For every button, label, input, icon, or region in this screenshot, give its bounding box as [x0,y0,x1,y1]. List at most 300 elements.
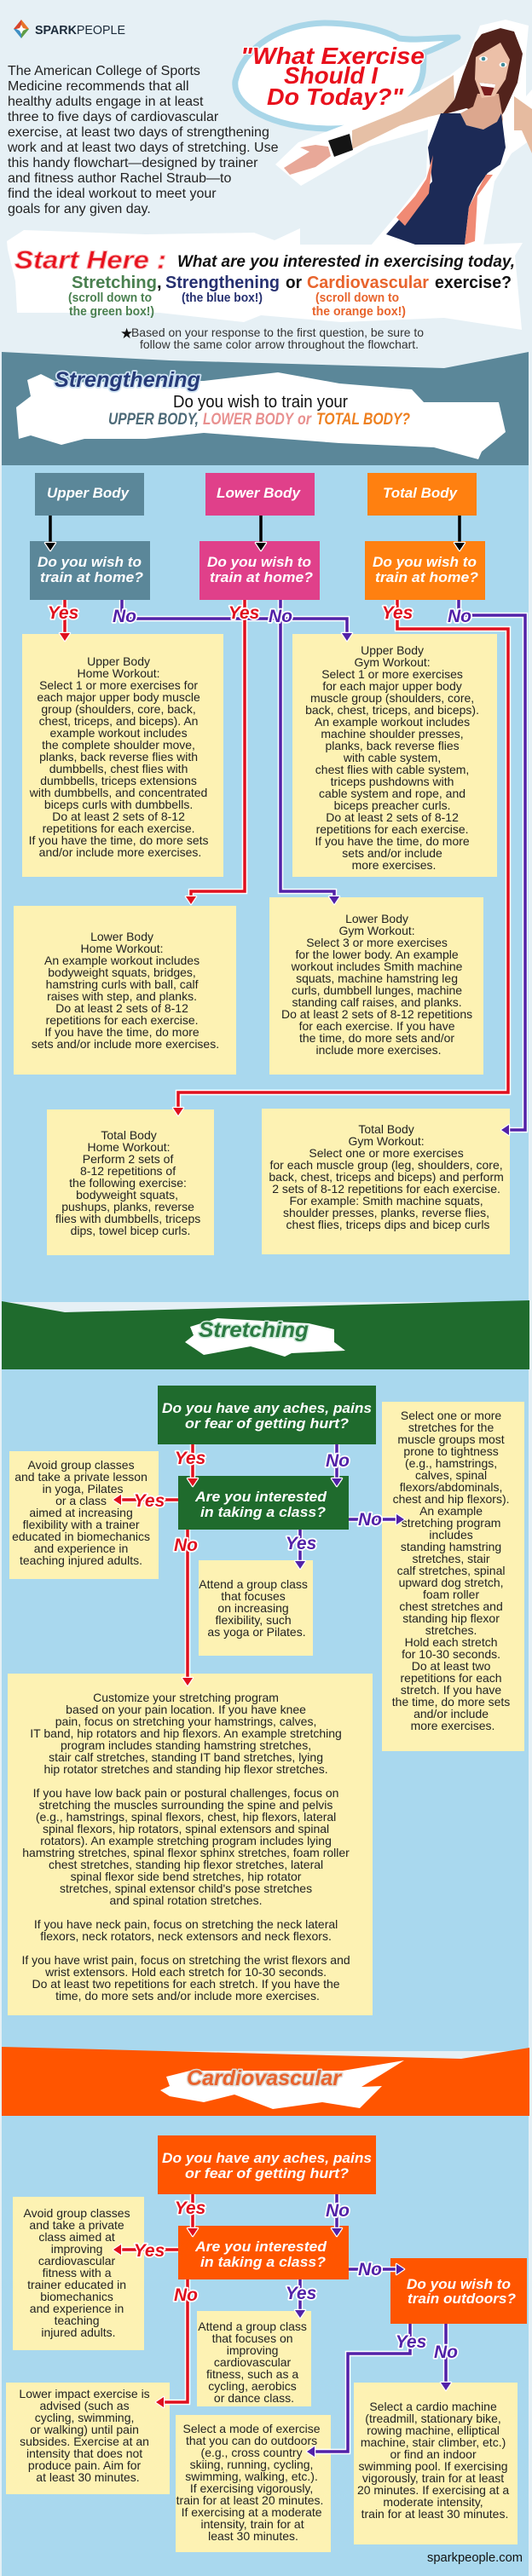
panel: customize your stretching program: Do at least two repetitions for each stretch. If you have the [32,1977,340,1991]
start here banner: Cardiovascular [307,274,429,292]
panel: cardio attend a group class: fitness, such as a [206,2367,298,2381]
arrow: outdoors yes [307,2324,410,2457]
arrow: upper body to question [45,516,55,550]
panel: total body gym workout [262,1109,510,1254]
footnote about arrow colour [120,326,424,351]
panel: lower impact exercise: advised (such as [40,2399,130,2412]
panel: upper body gym workout: with cable system, [343,751,441,764]
panel: outdoor exercise: swimming, walking, etc.). [185,2469,318,2483]
panel: customize your stretching program: time, do more sets and/or include more exercises. [55,1989,320,2003]
panel: upper body home workout: If you have the time, do more sets [29,833,208,847]
question box: upper body at home: Do you wish to [38,554,142,570]
panel: cardio machine: vigorously, train for at least [362,2471,504,2485]
label: outdoors yes: Yes [396,2332,426,2352]
label: outdoors no: No [434,2343,458,2362]
panel: upper body gym workout: An example workout includes [315,715,470,729]
header band: strengthening: TOTAL BODY? [316,411,410,429]
intro paragraph: find the ideal workout to meet your [8,187,217,201]
panel: avoid group classes: Avoid group classes [28,1458,135,1472]
panel: upper body home workout: Upper Body [87,654,150,668]
panel: upper body gym workout [292,634,497,877]
panel: cardio avoid group classes: injured adults. [41,2325,116,2339]
arrow: cardio class yes left [113,2245,178,2255]
panel: customize your stretching program: If you have wrist pain, focus on stretching the wrist flexors and [21,1953,350,1967]
label: cardio aches yes: Yes [175,2199,205,2218]
start here banner: the green box!) [69,304,154,319]
panel: upper body home workout: and/or include more exercises. [39,845,201,859]
header band: strengthening: or [298,411,312,429]
question box: aches and pains [158,1386,376,1444]
label: aches yes: Yes [175,1449,205,1468]
panel: customize your stretching program: spinal flexors, hip rotators, spinal extensors and spinal [43,1822,329,1835]
panel: upper body home workout: chest, triceps, and biceps). An [39,714,198,728]
panel: cardio machine: machine, stair climber, etc.) [361,2435,506,2449]
panel: total body home workout: bodyweight squats, [76,1188,178,1202]
panel: total body home workout: Home Workout: [88,1140,171,1154]
panel: upper body gym workout: If you have the time, do more [315,834,470,848]
panel: lower impact exercise: produce pain. Aim for [28,2458,142,2472]
panel: customize your stretching program: hamstring stretches, spinal flexor sphinx stretches, foam roller [22,1846,350,1859]
panel: avoid group classes: and experience in [34,1542,128,1555]
panel: cardio avoid group classes: trainer educated in [27,2278,126,2291]
panel: customize your stretching program: If you have neck pain, focus on stretching the neck lateral [34,1917,338,1931]
panel: upper body gym workout: more exercises. [352,858,436,872]
panel: lower impact exercise: Lower impact exercise is [19,2387,150,2400]
arrow: cardio aches yes [188,2194,198,2236]
footnote about arrow colour: ★ [120,326,133,342]
panel: avoid group classes: in yoga, Pilates [43,1482,124,1495]
bubble headline: Do Today?" [267,84,404,110]
panel: upper body home workout: biceps curls with dumbbells. [44,798,193,811]
start here banner: the orange box!) [312,304,406,319]
box: upper body: Upper Body [47,485,130,501]
panel: customize your stretching program: (e.g., hamstrings, spinal flexors, chest, hip flexors, lateral [36,1810,336,1824]
intro paragraph: three to five days of cardiovascular [8,110,219,124]
panel: outdoor exercise: If exercising at a moderate [182,2505,322,2519]
label: cardio class no right: No [358,2260,382,2279]
panel: customize your stretching program: stretches, spinal extensor child's pose stretches [60,1882,312,1895]
intro paragraph: this handy flowchart—designed by trainer [8,156,258,170]
panel: lower body gym workout: workout includes Smith machine [291,960,463,973]
panel: cardio avoid group classes: class aimed at [38,2230,115,2244]
panel: cardio machine: or find an indoor [390,2447,477,2461]
panel: lower body home workout: Lower Body [90,930,153,943]
panel: customize your stretching program: rotators). An example stretching program includes lying [40,1834,332,1847]
panel: total body gym workout: Gym Workout: [348,1134,425,1148]
arrow: total body no to gym workout [459,600,525,1135]
labels: upper body yes: Yes [48,603,78,623]
panel: total body home workout [47,1109,214,1255]
label: cardio class yes left: Yes [134,2241,165,2261]
panel: select stretches: An example [419,1504,483,1518]
panel: lower impact exercise: or walking) until pain [30,2423,139,2436]
panel: total body gym workout: chest flies, triceps dips and bicep curls [286,1218,489,1231]
panel: cardio avoid group classes [13,2197,144,2350]
panel: outdoor exercise: If exercising vigorously, [190,2481,313,2495]
panel: select stretches [382,1402,524,1751]
panel: customize your stretching program: wrist extensors. Hold each stretch for 10-30 seconds. [44,1965,327,1979]
panel: lower impact exercise: subsides. Exercise at an [20,2435,149,2448]
panel: lower body home workout: hamstring curls with ball, calf [46,977,199,991]
panel: attend a group class: flexibility, such [215,1613,292,1627]
panel: lower body gym workout: Select 3 or more exercises [306,936,448,949]
question box: total body at home: train at home? [375,569,479,585]
panel: select stretches: muscle groups most [397,1432,505,1446]
label: class yes down: Yes [286,1534,316,1553]
panel: select stretches: standing hamstring [401,1540,501,1553]
section background: strengthening [2,465,529,1302]
panel: select stretches: standing hip flexor [402,1611,500,1625]
arrow: cardio class no right [349,2264,404,2274]
panel: upper body home workout: Do at least 2 sets of 8-12 [52,810,185,823]
section background: stretching [2,1369,529,2051]
panel: total body home workout: the following exercise: [69,1176,187,1190]
panel: select stretches: stretching program [402,1516,500,1530]
arrow: lower body no to gym workout [280,600,339,904]
panel: attend a group class: on increasing [217,1601,289,1615]
panel: cardio machine: swimming pool. If exercising [359,2459,508,2473]
intro paragraph: exercise, at least two days of strengthening [8,125,269,140]
start here banner: Start Here : [14,246,166,274]
panel: customize your stretching program: and spinal rotation stretches. [110,1893,263,1907]
header band: strengthening [2,352,529,465]
arrow: outdoors no [441,2324,451,2390]
arrow: stretching class no down [182,1530,193,1686]
start here banner: or [286,274,302,292]
intro paragraph: healthy adults engage in at least [8,95,204,109]
question box: lower body at home: train at home? [210,569,314,585]
labels: total body yes: Yes [382,603,413,623]
label: cardio aches no: No [326,2201,350,2221]
panel: cardio attend a group class: cardiovascular [214,2355,292,2369]
panel: outdoor exercise: Select a mode of exercise [183,2422,321,2435]
panel: lower body home workout: An example workout includes [44,954,200,967]
panel: select stretches: calves, spinal [415,1468,487,1482]
panel: total body gym workout: back, chest, triceps and biceps) and perform [269,1170,504,1184]
panel: lower body home workout: raises with step, and planks. [47,989,197,1003]
panel: upper body gym workout: cable system and rope, and [319,787,466,800]
bubble headline: Should I [284,62,379,89]
arrow: stretching class yes left [113,1495,178,1505]
panel: total body gym workout: 2 sets of 8-12 repetitions for each exercise. [272,1182,500,1196]
arrow: stretching aches no [332,1444,342,1486]
panel: upper body gym workout: biceps preacher curls. [334,798,451,812]
panel: upper body gym workout: Gym Workout: [354,655,431,669]
panel: select stretches: the time, do more sets [392,1695,510,1709]
panel: select stretches: stretch. If you have [401,1683,501,1697]
panel: avoid group classes [9,1451,159,1579]
panel: select stretches: more exercises. [411,1719,494,1732]
footer: sparkpeople.com: sparkpeople.com [427,2550,523,2565]
panel: lower body home workout: bodyweight squats, bridges, [48,965,196,979]
panel: total body home workout: pushups, planks, reverse [61,1200,194,1213]
header band: cardiovascular: Cardiovascular [187,2066,342,2090]
question box: lower body at home: Do you wish to [207,554,311,570]
panel: customize your stretching program: program includes standing hamstring stretches, [61,1738,311,1752]
logo: SparkPeople: SPARKPEOPLE [35,23,125,37]
speech bubble shape [235,23,458,129]
panel: upper body gym workout: muscle group (shoulders, core, [310,691,474,705]
header band: strengthening: LOWER BODY [203,411,295,429]
panel: lower body gym workout: for the lower body. An example [295,948,459,961]
question box: total body at home [365,541,485,600]
panel: total body home workout: dips, towel bicep curls. [71,1224,190,1237]
panel: cardio machine: train for at least 30 minutes. [361,2507,508,2521]
panel: total body gym workout: For example: Smith machine squats, [289,1194,483,1207]
panel: lower impact exercise [6,2383,170,2494]
panel: select stretches: and/or include [413,1707,489,1720]
panel: attend a group class: that focuses [221,1589,286,1603]
panel: lower body gym workout: Do at least 2 sets of 8-12 repetitions [281,1007,472,1021]
panel: cardio avoid group classes: biomechanics [40,2290,113,2303]
panel: lower body home workout: sets and/or include more exercises. [32,1037,219,1051]
start here banner: (scroll down to [68,291,152,305]
panel: cardio machine: rowing machine, elliptical [367,2423,500,2437]
header band: cardiovascular [2,2047,529,2116]
panel: select stretches: stretches. [425,1623,477,1637]
panel: upper body home workout: the complete shoulder move, [42,738,195,752]
arrow: stretching class no right [349,1514,404,1524]
panel: outdoor exercise: skiing, running, cycling, [190,2458,313,2471]
panel: customize your stretching program: based on your pain location. If you have knee [66,1703,306,1716]
panel: lower body home workout: Do at least 2 sets of 8-12 [55,1001,188,1015]
question box: class cardio [178,2226,349,2279]
panel: attend a group class [199,1560,313,1656]
panel: upper body gym workout: sets and/or include [342,846,442,860]
panel: outdoor exercise: that you can do outdoors [186,2434,317,2447]
panel: upper body home workout: each major upper body muscle [37,690,200,704]
panel: cardio avoid group classes: and experience in [30,2302,124,2315]
panel: cardio machine: 20 minutes. If exercising at a [357,2483,509,2497]
label: cardio class no down: No [174,2285,198,2305]
panel: upper body home workout: repetitions for each exercise. [43,821,195,835]
labels: lower body yes: Yes [228,603,259,623]
panel: select stretches: (e.g., hamstrings, [405,1456,497,1470]
panel: cardio machine [354,2383,518,2544]
panel: customize your stretching program: spinal flexor side bend stretches, hip rotator [71,1870,302,1883]
panel: upper body home workout: with dumbbells, and concentrated [29,786,207,799]
start here banner: Stretching [72,274,157,292]
panel: outdoor exercise: intensity, train for at [200,2517,304,2531]
panel: select stretches: stretches for the [408,1421,494,1434]
panel: select stretches: calf stretches, spinal [397,1564,505,1577]
question box: upper body at home: train at home? [40,569,144,585]
panel: total body home workout: Total Body [101,1128,157,1142]
footnote about arrow colour: Based on your response to the first question, be sure to [131,326,424,339]
panel: avoid group classes: educated in biomechanics [12,1530,150,1543]
panel: avoid group classes: teaching injured adults. [20,1553,142,1567]
panel: upper body gym workout: Upper Body [361,643,424,657]
panel: upper body home workout: dumbbells, triceps extensions [40,774,197,787]
panel: customize your stretching program: If you have low back pain or postural challenges, focus on [33,1786,338,1800]
question box: train outdoors [390,2258,527,2324]
box: total body [367,473,477,516]
panel: cardio avoid group classes: improving [51,2242,102,2256]
panel: lower impact exercise: cycling, swimming, [35,2411,134,2424]
label: cardio class yes down: Yes [286,2284,316,2303]
panel: upper body gym workout: chest flies with cable system, [315,763,469,776]
question box: aches and pains cardio [158,2135,376,2194]
section background: cardiovascular [2,2116,529,2576]
panel: cardio attend a group class: cycling, aerobics [208,2379,297,2393]
panel: outdoor exercise: (e.g., cross country [201,2446,303,2459]
panel: select stretches: flexors/abdominals, [400,1480,502,1494]
panel: upper body gym workout: machine shoulder presses, [321,727,464,741]
box: lower body [205,473,315,516]
panel: select stretches: for 10-30 seconds. [402,1647,500,1661]
box: upper body [35,473,144,516]
panel: outdoor exercise: train for at least 20 minutes. [176,2493,323,2507]
intro paragraph: and fitness author Rachel Straub—to [8,171,231,186]
intro paragraph: goals for any given day. [8,202,151,216]
start here banner: (scroll down to [315,291,399,305]
panel: lower body gym workout: the time, do more sets and/or [299,1031,454,1045]
labels: upper body no: No [113,607,136,626]
panel: upper body home workout: planks, back reverse flies with [39,750,198,764]
panel: upper body home workout: Select 1 or more exercises for [39,678,198,692]
bubble headline [240,43,425,110]
labels: total body no: No [448,607,471,626]
panel: total body home workout: flies with dumbbells, triceps [55,1212,200,1225]
panel: avoid group classes: or a class [55,1494,107,1507]
question box: aches and pains cardio: or fear of getting hurt? [185,2165,350,2181]
arrow: cardio class no to lower impact [156,2279,188,2407]
panel: upper body gym workout: planks, back reverse flies [325,739,460,752]
start here banner: , [157,274,162,292]
panel: lower body gym workout: for each exercise. If you have [299,1019,455,1033]
panel: lower impact exercise: intensity that does not [26,2446,142,2460]
panel: customize your stretching program: stair calf stretches, standing IT band stretches, lying [49,1750,323,1764]
panel: lower body gym workout: standing calf raises, and planks. [292,995,462,1009]
panel: select stretches: includes [429,1528,473,1542]
panel: total body gym workout: shoulder presses, planks, reverse flies, [283,1206,489,1219]
panel: avoid group classes: and take a private lesson [14,1470,147,1484]
panel: cardio machine: moderate intensity, [383,2495,483,2509]
panel: cardio avoid group classes: teaching [55,2314,100,2327]
label: class yes left: Yes [134,1491,165,1511]
panel: select stretches: chest stretches and [399,1599,503,1613]
panel: cardio attend a group class [197,2311,311,2406]
panel: customize your stretching program: flexors, neck rotators, neck extensors and neck flexors. [40,1929,332,1943]
question box: aches and pains: or fear of getting hurt? [185,1415,350,1432]
arrow: upper body no to gym workout [122,600,352,641]
panel: upper body home workout: dumbbells, chest flies with [49,762,188,775]
panel: cardio avoid group classes: cardiovascular [38,2254,116,2268]
panel: upper body gym workout: triceps pushdowns with [331,775,454,788]
panel: total body home workout: Perform 2 sets of [83,1152,173,1166]
question box: train outdoors: Do you wish to [407,2276,511,2292]
panel: avoid group classes: flexibility with a trainer [23,1518,140,1531]
start here banner: (the blue box!) [182,291,263,305]
box: total body: Total Body [383,485,459,501]
label: class no down: No [174,1536,198,1555]
panel: upper body home workout [22,634,223,877]
start here banner: What are you interested in exercising today, [177,253,515,271]
panel: avoid group classes: aimed at increasing [29,1506,133,1519]
arrow: stretching class yes down [295,1530,305,1569]
question box: upper body at home [30,541,150,600]
panel: upper body gym workout: back, chest, triceps, and biceps). [305,703,479,717]
header band: stretching [2,1300,529,1369]
panel: upper body home workout: group (shoulders, core, back, [41,702,196,716]
panel: customize your stretching program: pain, focus on stretching your hamstrings, calves, [55,1714,316,1728]
arrow: stretching aches yes [188,1444,198,1486]
panel: cardio attend a group class: that focuses on [212,2331,293,2345]
panel: outdoor exercise: least 30 minutes. [208,2529,298,2543]
start here banner: Strengthening [165,274,280,292]
panel: cardio machine: Select a cardio machine [369,2400,497,2413]
panel: cardio avoid group classes: Avoid group classes [24,2206,130,2220]
panel: select stretches: stretches, stair [413,1552,490,1565]
panel: lower body gym workout: Gym Workout: [338,924,415,937]
question box: aches and pains: Do you have any aches, pains [162,1400,372,1416]
header band: strengthening: UPPER BODY, [108,411,199,429]
panel: cardio avoid group classes: fitness with a [43,2266,112,2279]
arrow: cardio class yes down [295,2279,305,2318]
panel: customize your stretching program [8,1674,373,2015]
question box: taking a class [178,1476,349,1530]
panel: total body gym workout: for each muscle group (leg, shoulders, core, [269,1158,503,1172]
box: lower body: Lower Body [217,485,302,501]
panel: upper body home workout: example workout includes [50,726,188,740]
panel: lower body gym workout: Lower Body [345,912,408,925]
header band: strengthening: Strengthening [55,368,200,392]
panel: select stretches: chest and hip flexors). [393,1492,510,1506]
intro paragraph: The American College of Sports [8,64,200,78]
question box: taking a class: in taking a class? [200,1504,327,1520]
panel: cardio avoid group classes: and take a private [29,2218,124,2232]
panel: customize your stretching program: stretching the muscles surrounding the spine and pelvis [39,1798,332,1812]
panel: lower body gym workout: squats, machine hamstring leg [296,971,458,985]
panel: customize your stretching program: Customize your stretching program [93,1691,279,1704]
arrow: total body yes to home workout [173,600,508,1115]
labels: lower body no: No [269,607,292,626]
question box: train outdoors: train outdoors? [408,2291,517,2307]
header band: stretching: Stretching [199,1318,309,1342]
bubble headline: "What Exercise [240,43,425,69]
panel: cardio attend a group class: improving [227,2343,278,2357]
arrow: upper body yes to home workout [60,600,70,641]
panel: select stretches: prone to tightness [403,1444,499,1458]
panel: lower body home workout: repetitions for each exercise. [46,1013,199,1027]
panel: outdoor exercise [176,2415,331,2552]
panel: customize your stretching program: chest stretches, standing hip flexor stretches, lateral [49,1858,323,1871]
question box: aches and pains cardio: Do you have any aches, pains [162,2150,372,2166]
header band: strengthening: Do you wish to train your [173,393,348,412]
panel: customize your stretching program: hip rotator stretches and standing hip flexor stretches. [44,1762,328,1776]
panel: lower body gym workout: curls, dumbbell lunges, machine [292,983,462,997]
panel: select stretches: Do at least two [412,1659,491,1673]
panel: lower body home workout [14,906,236,1075]
panel: cardio machine: (treadmill, stationary bike, [365,2412,501,2425]
panel: select stretches: upward dog stretch, [399,1576,504,1589]
label: class no right: No [358,1510,382,1530]
panel: select stretches: Hold each stretch [405,1635,498,1649]
panel: lower impact exercise: at least 30 minutes. [36,2470,140,2484]
arrow: lower body to question [256,516,266,550]
arrow: total body to question [454,516,465,550]
panel: cardio attend a group class: or dance class. [214,2391,294,2405]
arrow: lower body yes to home workout [186,600,245,904]
intro paragraph: work and at least two days of stretching. Use [7,141,279,155]
panel: upper body gym workout: for each major upper body [322,679,462,693]
panel: lower body home workout: Home Workout: [81,942,164,955]
arrow: cardio aches no [332,2194,342,2236]
start here banner: exercise? [435,274,512,292]
question box: taking a class: Are you interested [194,1489,327,1505]
panel: lower body home workout: If you have the time, do more [44,1025,200,1039]
panel: upper body gym workout: repetitions for each exercise. [316,822,469,836]
